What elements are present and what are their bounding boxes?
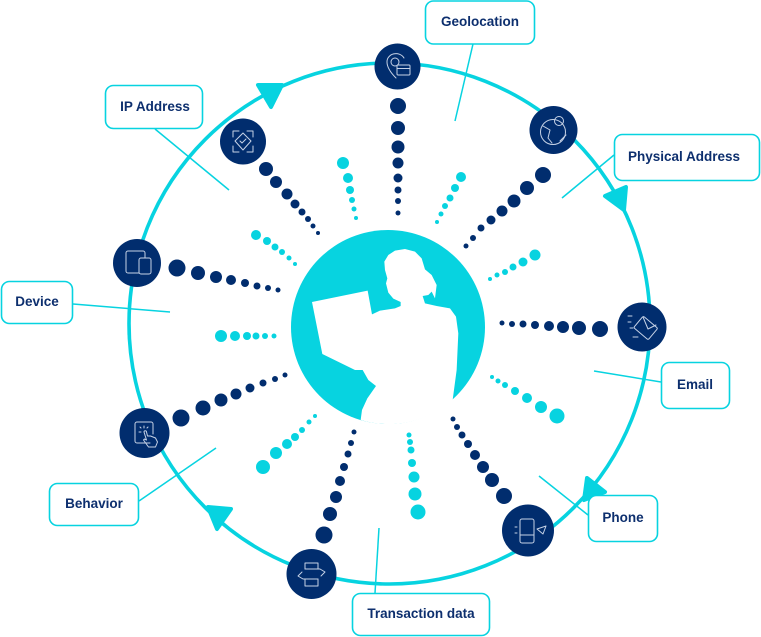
icon: transaction arrows xyxy=(286,549,336,599)
central disc with silhouette xyxy=(291,230,485,424)
callout: Phone: Phone xyxy=(602,510,644,525)
callout: IP Address: IP Address xyxy=(120,99,190,114)
navy dots: IP address xyxy=(259,162,320,235)
icon: location pin and card xyxy=(374,44,420,90)
callout: Transaction data xyxy=(352,594,490,636)
callout: Physical Address xyxy=(614,134,760,180)
callout: Email: Email xyxy=(677,377,713,392)
callout: Phone xyxy=(588,496,658,542)
callout: Transaction data: Transaction data xyxy=(367,606,475,621)
icon: scan target xyxy=(220,118,266,164)
icon: tablet and phone xyxy=(113,239,161,287)
callout: Device: Device xyxy=(15,294,59,309)
navy dots: device xyxy=(168,260,280,292)
direction arrows xyxy=(208,85,626,529)
icon: tap on tablet xyxy=(120,408,170,458)
teal dot spokes xyxy=(215,157,564,520)
navy dots: transaction data xyxy=(316,430,356,544)
callout: Email xyxy=(662,362,730,408)
silhouette: person holding a laptop xyxy=(312,249,458,424)
callout: Physical Address: Physical Address xyxy=(628,149,740,164)
callout: Behavior: Behavior xyxy=(65,496,124,511)
callout: IP Address xyxy=(106,86,202,128)
navy dots: email xyxy=(500,320,608,337)
navy dots: geolocation xyxy=(390,98,406,216)
callout: Geolocation xyxy=(426,1,534,44)
outer ring xyxy=(129,63,650,584)
connector lines xyxy=(73,44,661,593)
callout: Device xyxy=(2,282,72,324)
navy dots: physical address xyxy=(464,167,551,248)
icon: envelope xyxy=(618,302,666,352)
navy dots: phone xyxy=(450,416,512,504)
icon: phone and arrow xyxy=(502,504,554,556)
icon: globe xyxy=(530,106,578,154)
navy dots: behavior xyxy=(172,372,288,426)
callout: Geolocation: Geolocation xyxy=(441,14,519,29)
callout: Behavior xyxy=(50,484,138,526)
